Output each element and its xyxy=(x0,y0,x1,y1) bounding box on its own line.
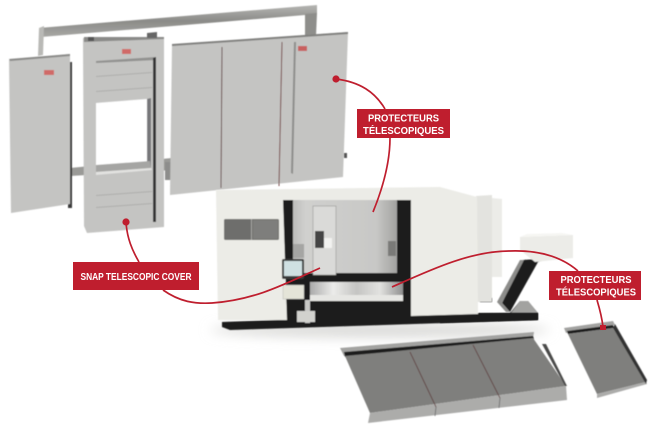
lathe machine xyxy=(216,187,538,330)
connector: snap telescopic cover xyxy=(126,222,320,303)
panel: right telescopic cover xyxy=(165,32,348,195)
callout: protecteurs télescopiques right: TÉLESCOPIQUES xyxy=(556,286,636,298)
panel: bottom wide way cover xyxy=(340,332,567,423)
callout: protecteurs télescopiques right: PROTECTEURS xyxy=(560,275,632,286)
callout: protecteurs télescopiques top xyxy=(357,109,450,138)
chip conveyor xyxy=(440,233,573,323)
door interior xyxy=(293,200,397,273)
panel: bottom right way cover xyxy=(564,321,647,398)
machine window xyxy=(224,219,279,240)
callout: protecteurs télescopiques right xyxy=(549,271,641,300)
dot: right cover marker xyxy=(332,75,340,83)
panel: left telescopic cover xyxy=(9,54,72,213)
marker: way cover xyxy=(600,325,606,330)
connector: protecteurs right xyxy=(392,251,603,327)
floor shadow xyxy=(210,323,550,337)
callout: snap telescopic cover xyxy=(73,262,199,290)
connector: protecteurs top xyxy=(336,79,390,212)
callout: snap telescopic cover: SNAP TELESCOPIC COVER xyxy=(80,272,192,283)
callout: protecteurs télescopiques top: PROTECTEURS xyxy=(368,114,439,124)
panel: centre snap telescopic cover xyxy=(83,32,164,233)
rear frame xyxy=(38,5,317,176)
control panel xyxy=(282,259,304,279)
callout: protecteurs télescopiques top: TÉLESCOPIQUES xyxy=(363,125,444,137)
dot: snap cover marker xyxy=(122,218,130,226)
